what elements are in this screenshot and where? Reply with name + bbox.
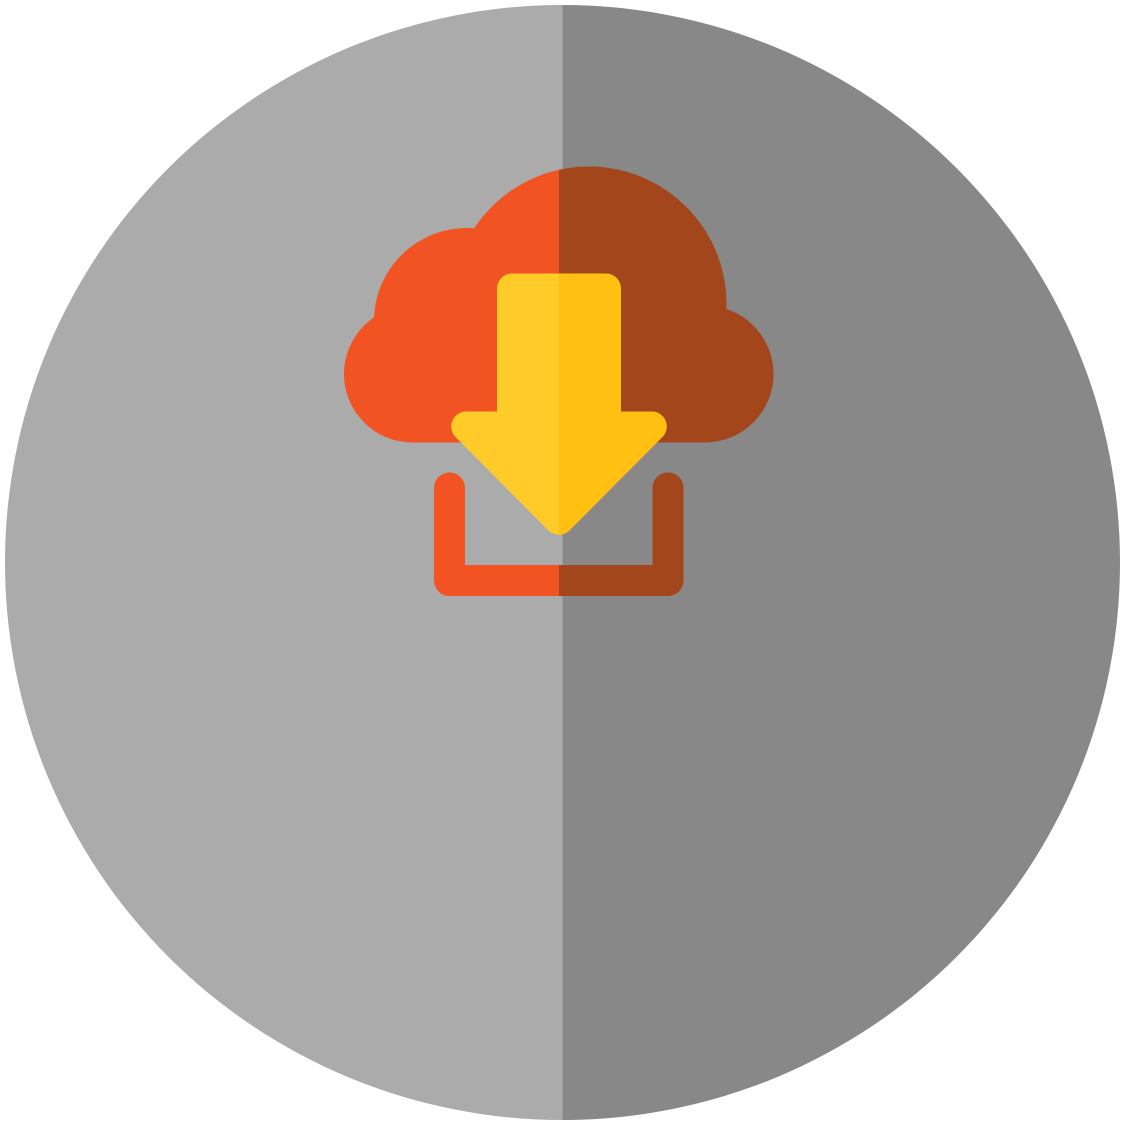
icon: download tray <box>450 488 668 580</box>
icon: download arrow <box>451 274 667 535</box>
icon: cloud <box>344 166 774 442</box>
